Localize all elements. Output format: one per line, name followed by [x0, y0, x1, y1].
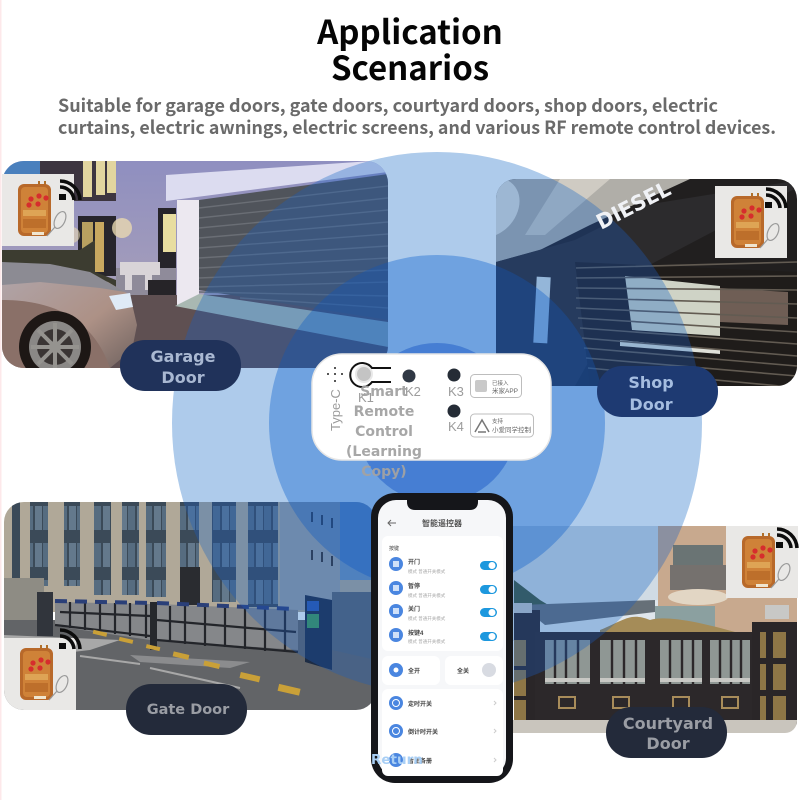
wifi icon: shop: [765, 189, 786, 208]
Type-C label: Type-C: [328, 389, 343, 431]
row: open: 模式 普通开关模式: [408, 568, 446, 575]
row: open: [389, 557, 497, 575]
phone: [371, 493, 513, 783]
notch: [407, 500, 478, 510]
card: timers: 倒计时开关: [408, 728, 438, 736]
device caption: [346, 384, 422, 480]
pill: courtyard door: Courtyard: [623, 714, 713, 733]
K3 button: K3: [448, 384, 464, 399]
left edge tint: [0, 0, 2, 800]
card: timers: 定时开关: [408, 700, 432, 708]
wifi icon: gate: [59, 630, 80, 649]
card: all off: [445, 656, 503, 685]
title: [316, 6, 503, 90]
row: open: 开门: [408, 558, 420, 566]
description: curtains, electric awnings, electric screens, and various RF remote control devices.: [58, 114, 776, 140]
smart remote device: [312, 354, 551, 460]
device caption: Remote: [354, 404, 414, 420]
pill: courtyard door: [606, 707, 727, 758]
badge: Mi Home app: [470, 374, 522, 398]
remote inset: courtyard: [726, 526, 798, 598]
K4 button: [448, 404, 464, 434]
card: buttons list: 按键: [389, 545, 399, 552]
title: Scenarios: [331, 42, 489, 90]
wifi icon: garage: [59, 181, 80, 200]
pill: shop door: [597, 366, 718, 417]
badge: Xiao Ai control: [470, 414, 534, 437]
remote inset: garage: [2, 174, 74, 246]
pill: garage door: Garage: [151, 347, 216, 366]
K1 button with callout: K1: [358, 390, 374, 405]
row: button 4: 模式 普通开关模式: [408, 638, 446, 645]
badge: Mi Home app: 已接入: [492, 379, 509, 387]
device caption: Control: [355, 424, 413, 440]
device pinhole dots: [327, 367, 343, 382]
K1 button with callout: [350, 363, 391, 405]
pill: garage door: [120, 340, 241, 391]
description: Suitable for garage doors, gate doors, courtyard doors, shop doors, electric: [58, 92, 718, 118]
pill: gate door: [126, 684, 247, 735]
app header: [388, 518, 462, 528]
pill: gate door: Gate Door: [147, 702, 230, 718]
photo: shop door: [496, 179, 800, 386]
wifi icon: courtyard: [776, 529, 797, 548]
photo: gate door: [4, 502, 376, 710]
card: timers: 暂主各册: [408, 757, 432, 765]
description: [58, 92, 776, 140]
card: buttons list: [382, 536, 503, 651]
device caption: Smart: [360, 384, 408, 400]
K2 button: [402, 370, 421, 399]
card: all on: 全开: [408, 667, 420, 675]
pill: shop door: Door: [629, 395, 673, 414]
row: close: 关门: [408, 605, 420, 613]
badge: Xiao Ai control: 支持: [492, 417, 504, 425]
pill: shop door: Shop: [628, 373, 674, 392]
remote inset: shop: [715, 186, 787, 258]
row: pause: [389, 581, 497, 599]
photo: courtyard door: [500, 526, 797, 733]
K3 button: [448, 368, 464, 399]
badge: Mi Home app: 米家APP: [492, 386, 518, 395]
app header: 智能遥控器: [422, 518, 462, 528]
row: pause: 暂停: [408, 582, 420, 590]
card: all off: 全关: [457, 667, 469, 675]
K2 button: K2: [405, 384, 421, 399]
row: close: [389, 604, 497, 622]
title: Application: [316, 6, 503, 54]
signal circles: [172, 152, 702, 694]
pill: courtyard door: Door: [646, 734, 690, 753]
row: pause: 模式 普通开关模式: [408, 592, 446, 599]
shop sign: DIESEL: [592, 177, 675, 234]
card: all on: [382, 656, 440, 685]
card: timers: [382, 689, 503, 776]
photo: garage door: [2, 161, 388, 383]
device caption: (Learning: [346, 444, 422, 460]
pill: garage door: Door: [161, 368, 205, 387]
badge: Xiao Ai control: 小爱同学控制: [492, 425, 532, 434]
row: close: 模式 普通开关模式: [408, 615, 446, 622]
device caption: Copy): [361, 464, 407, 480]
row: button 4: 按键4: [408, 629, 424, 637]
remote inset: gate: [4, 638, 76, 710]
row: button 4: [389, 628, 497, 645]
K4 button: K4: [448, 419, 464, 434]
return label: Return: [371, 752, 423, 768]
